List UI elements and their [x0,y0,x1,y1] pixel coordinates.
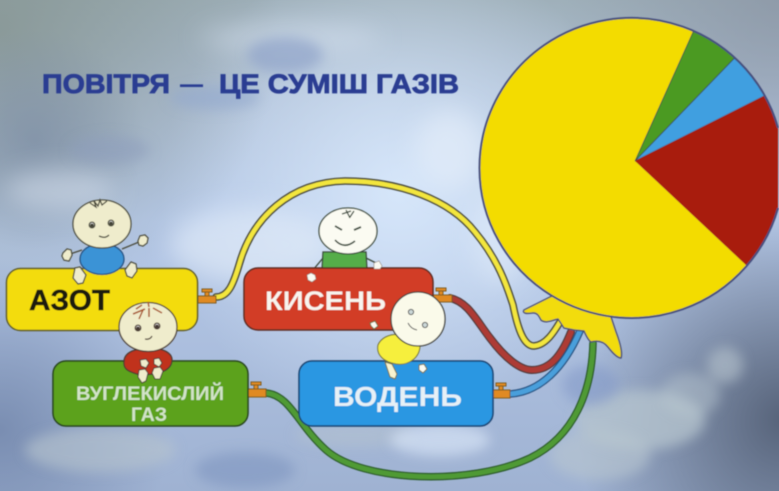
balloon neck [523,293,622,358]
valve: carbon dioxide [248,382,266,397]
title: — [180,69,203,99]
title [42,69,459,99]
valve: nitrogen [198,289,216,303]
label box: oxygen [244,261,433,330]
pie outline [480,18,778,318]
title: ПОВІТРЯ [42,69,170,99]
label box: nitrogen: АЗОТ [29,285,110,317]
label box: nitrogen [6,268,198,330]
valve: oxygen [433,288,452,302]
character: oxygen baby [313,208,377,270]
label box: oxygen: КИСЕНЬ [265,286,386,316]
title: ЦЕ СУМІШ ГАЗІВ [219,69,459,99]
pie slice: nitrogen [480,18,747,318]
pie slice: oxygen [635,96,778,266]
character: carbon dioxide baby [119,302,177,383]
label box: hydrogen [299,361,493,426]
label box: carbon dioxide: ВУГЛЕКИСЛИЙ [76,383,224,405]
pie chart: air composition [480,18,778,318]
tube: hydrogen (blue) [510,331,580,394]
label box: hydrogen: ВОДЕНЬ [333,381,462,412]
label box: carbon dioxide: ГАЗ [131,405,167,426]
tube: carbon dioxide (green) [266,343,593,477]
pie slice: hydrogen [635,58,765,161]
character: nitrogen baby [62,200,148,284]
pie slice: carbon dioxide [635,31,735,161]
character: hydrogen baby [370,292,445,379]
label box: carbon dioxide [53,361,248,426]
tube: nitrogen (yellow) [216,181,560,346]
tube: oxygen (red) [450,298,571,370]
valve: hydrogen [493,383,510,398]
